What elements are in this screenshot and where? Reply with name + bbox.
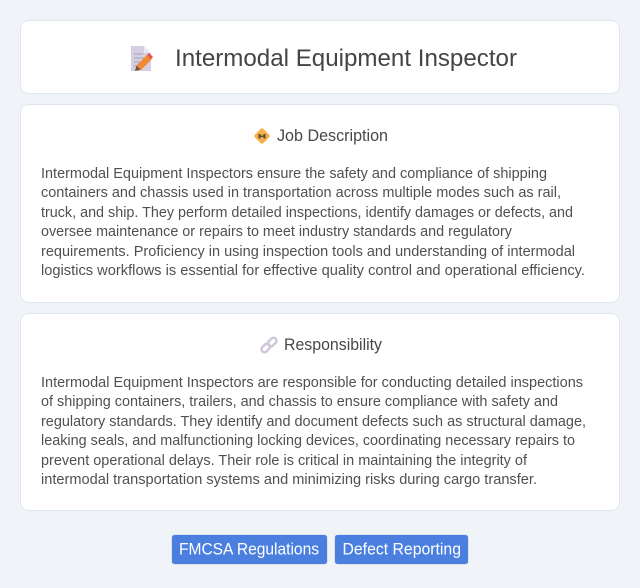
- text block: responsibility: regulatory standards. They identify and document defects such as structural damage,: [41, 414, 586, 430]
- text block: responsibility: Intermodal Equipment Inspectors are responsible for conducting detailed inspections: [41, 375, 583, 391]
- text block: responsibility: intermodal transportation systems and minimizing risks during cargo transfer.: [41, 472, 537, 488]
- text block: job description: requirements. Proficiency in using inspection tools and understanding of intermodal: [41, 244, 575, 260]
- header panel: [20, 20, 620, 94]
- tag: FMCSA Regulations: FMCSA Regulations: [179, 540, 319, 558]
- icon: chain link: [260, 337, 278, 353]
- text block: responsibility: [41, 375, 586, 488]
- panel: job description: [20, 104, 620, 302]
- text block: responsibility: leaking seals, and malfunctioning locking devices, coordinating necessary repairs to: [41, 433, 575, 449]
- text block: job description: containers and chassis used in transportation across multiple modes such as rail,: [41, 185, 561, 201]
- text block: responsibility: of shipping containers, trailers, and chassis to ensure compliance with safety and: [41, 394, 558, 410]
- title: Intermodal Equipment Inspector: [175, 45, 517, 72]
- heading: job description: Job Description: [277, 126, 388, 145]
- text block: job description: logistics workflows is essential for effective quality control and operational efficiency.: [41, 263, 585, 279]
- tag: Defect Reporting: [334, 534, 468, 564]
- icon: orange diamond sign: [254, 128, 270, 144]
- text block: job description: Intermodal Equipment Inspectors ensure the safety and compliance of shipping: [41, 166, 547, 182]
- tag: FMCSA Regulations: [172, 534, 328, 564]
- tag: Defect Reporting: Defect Reporting: [342, 540, 461, 558]
- text block: job description: truck, and ship. They perform detailed inspections, identify damages or defects, and: [41, 205, 573, 221]
- heading: responsibility: Responsibility: [284, 335, 383, 354]
- icon: document with pencil: [131, 46, 153, 71]
- text block: job description: [41, 166, 585, 279]
- panel: responsibility: [20, 314, 620, 510]
- text block: responsibility: prevent operational delays. Their role is critical in maintaining the integrity of: [41, 453, 528, 469]
- text block: job description: oversee maintenance or repairs to meet industry standards and regulatory: [41, 224, 513, 240]
